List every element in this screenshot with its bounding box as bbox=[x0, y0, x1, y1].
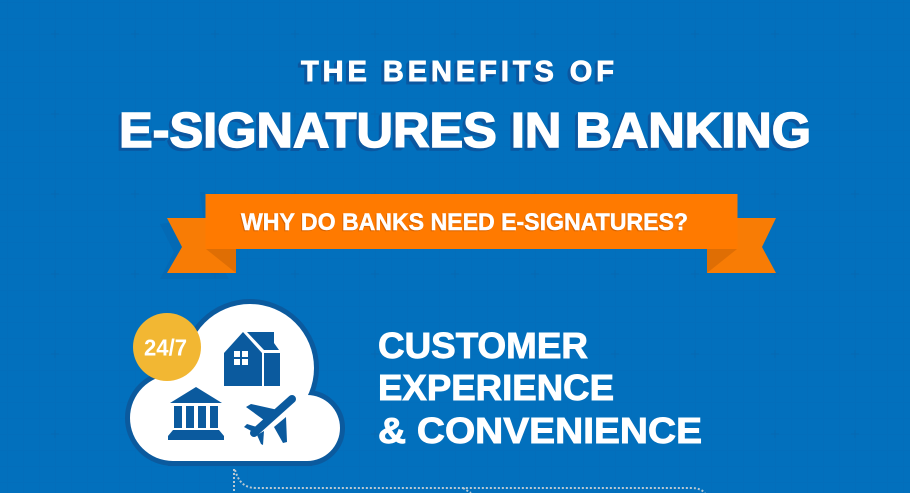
title line 1: THE BENEFITS OF bbox=[301, 56, 614, 88]
section heading bbox=[378, 325, 702, 451]
heading line 3: & CONVENIENCE bbox=[378, 410, 702, 451]
heading line 2: EXPERIENCE bbox=[378, 367, 614, 408]
cloud with icons bbox=[130, 304, 340, 461]
ribbon left tail bbox=[160, 192, 236, 279]
cloud shape bbox=[130, 304, 340, 461]
icon: airplane bbox=[244, 399, 292, 445]
orange ribbon banner bbox=[160, 192, 776, 279]
badge: 24/7 bbox=[133, 313, 201, 381]
dotted connector line bbox=[234, 469, 705, 493]
heading line 1: CUSTOMER bbox=[378, 325, 588, 366]
icon: house bbox=[224, 332, 280, 386]
ribbon right tail bbox=[707, 218, 776, 273]
title bbox=[119, 56, 811, 158]
title line 2: E-SIGNATURES IN BANKING bbox=[119, 104, 811, 158]
icon: bank building bbox=[168, 387, 224, 440]
badge: 24/7: 24/7 bbox=[144, 334, 187, 360]
banner text: WHY DO BANKS NEED E-SIGNATURES? bbox=[241, 209, 688, 236]
ribbon main band bbox=[206, 194, 738, 249]
